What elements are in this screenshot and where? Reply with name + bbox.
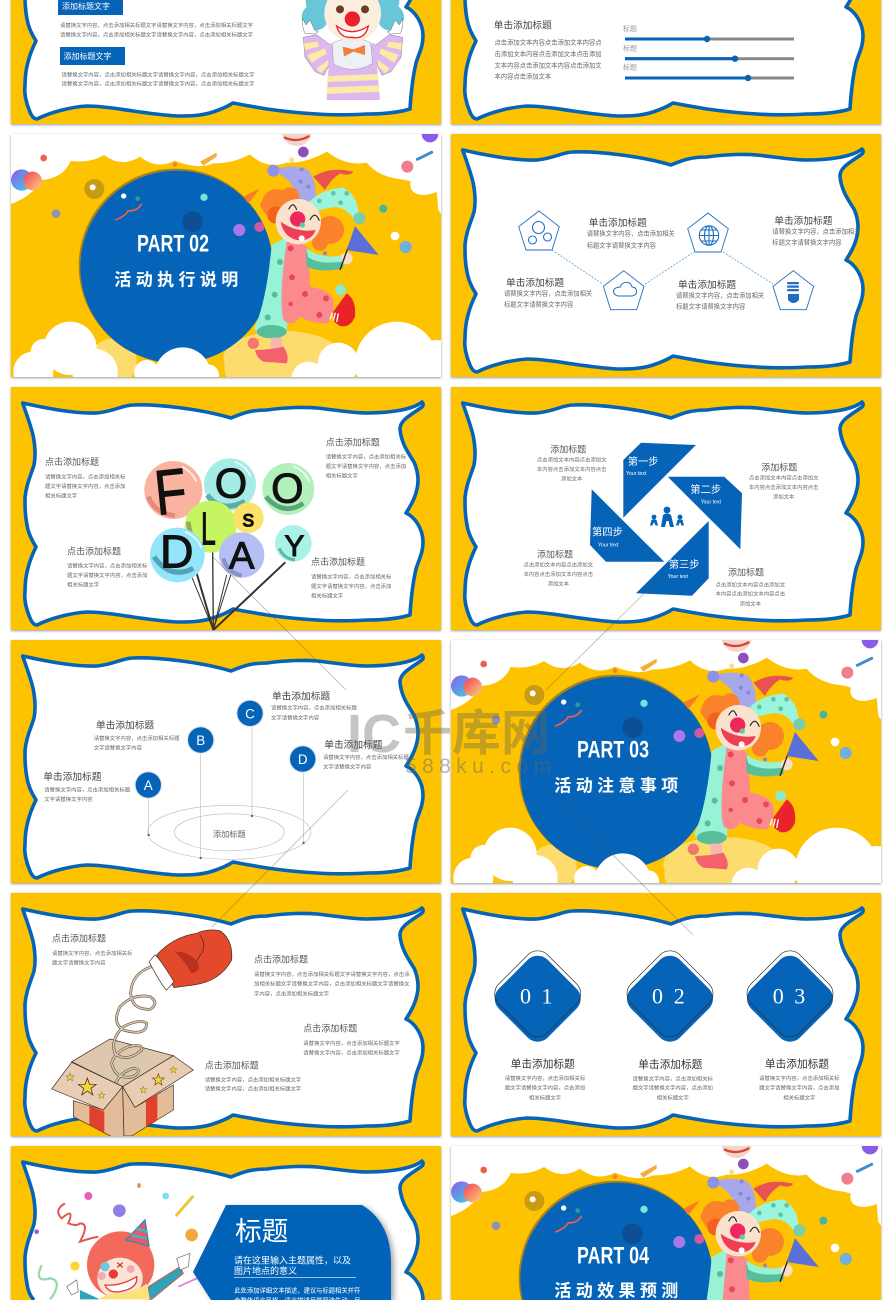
text block 1 — [587, 217, 676, 249]
text block 1 — [537, 443, 607, 483]
slider 2 — [623, 44, 794, 62]
slide: PART 04 divider (bottom right, cropped) — [451, 1127, 881, 1300]
text block 4 — [205, 1059, 301, 1093]
text block 1: 添加标题 — [550, 443, 586, 454]
part number: PART 03 — [577, 737, 649, 764]
text block D: 请替换文字内容，点击添加相关标题 — [323, 753, 409, 761]
text block 4: 添加文本 — [740, 599, 762, 607]
text block 2 — [326, 437, 407, 480]
diamond 03: 03 — [773, 983, 805, 1008]
step 1 blade: Your text — [626, 471, 647, 477]
badge D: D — [298, 752, 308, 767]
text block 1: 题文字请替换文字内容 — [52, 958, 106, 966]
illustration: balloons: O — [271, 464, 304, 511]
slide: clown with title panel (bottom left, cropped) — [11, 1146, 441, 1300]
text block 1: 请替换文字内容，点击添加相关 — [587, 229, 676, 238]
text block: 点击添加文本内容点击添加文本内容点 — [494, 37, 602, 46]
illustration: balloons: D — [160, 526, 194, 578]
text block 2: 请替换文字内容，点击添加相关标题文字请替换文字内容，点击添 — [254, 970, 410, 978]
text block B: 请替换文字内容，点击添加相关标题 — [94, 734, 180, 742]
text block 2: 添加标题 — [761, 461, 797, 472]
slider 1: 标题 — [623, 24, 637, 33]
badge A: A — [144, 778, 153, 793]
text block 4: 请替换文字内容，点击添加相关 — [676, 290, 765, 299]
text block 3: 添加标题 — [537, 548, 573, 559]
part number: PART 04 — [577, 1243, 649, 1270]
text block D: 文字请替换文字内容 — [323, 762, 372, 770]
icon: molecule pentagon — [519, 211, 559, 250]
step 4 blade: 第四步 — [592, 526, 623, 539]
text block C: 文字请替换文字内容 — [271, 713, 320, 721]
icon: three people — [650, 507, 684, 527]
badge C: C — [245, 706, 255, 721]
text block 2 — [254, 954, 410, 997]
text block: 本内容点击添加文本 — [494, 71, 552, 80]
slide: ABCD orbit diagram — [11, 640, 441, 883]
text block 3: 点击添加标题 — [303, 1022, 357, 1033]
text block 3 — [523, 548, 594, 588]
text block 3 — [303, 1022, 400, 1056]
text block C: 单击添加标题 — [272, 690, 330, 702]
heading tag 1 — [58, 0, 123, 15]
text block 3 — [67, 545, 148, 588]
text block 1: 请替换文字内容，点击添加相关标题文字请替换文字内容，点击添加相关标题文字 — [60, 30, 253, 38]
text block 3: 点击添加标题 — [67, 545, 121, 556]
text block 4: 题文字请替换文字内容，点击添加 — [311, 582, 391, 590]
text block 3: 单击添加标题 — [506, 277, 564, 289]
heading tag 2: 添加标题文字 — [64, 51, 112, 61]
text block 2: 标题文字请替换文字内容 — [772, 237, 842, 246]
step 1 blade: 第一步 — [628, 455, 659, 468]
watermark logo text — [347, 704, 551, 778]
text block 03: 题文字请替换文字内容，点击添加 — [759, 1083, 840, 1091]
step 4 blade — [590, 489, 664, 562]
illustration: balloons: L — [201, 502, 216, 554]
diamond 02 — [621, 945, 719, 1047]
badge B: B — [196, 733, 205, 748]
illustration: clown with confetti — [34, 1183, 210, 1299]
text block 2: 加相关标题文字请替换文字内容，点击添加相关标题文字请替换文 — [254, 979, 410, 987]
watermark — [212, 557, 693, 935]
text block 2: 点击添加文本内容点击添加文 — [749, 474, 819, 482]
heading: 单击添加标题 — [494, 20, 552, 32]
text block 4: 点击添加标题 — [205, 1059, 259, 1070]
title panel — [193, 1205, 391, 1300]
drop lines — [149, 727, 304, 858]
text block 4: 点击添加文本内容点击添加文 — [715, 580, 786, 588]
panel body: 此处添加详细文本描述，建议与标题相关并符 — [234, 1285, 360, 1294]
text block — [494, 37, 602, 80]
step 3 blade: 第三步 — [669, 558, 700, 571]
text block 02: 题文字请替换文字内容，点击添加 — [632, 1084, 713, 1092]
text block 2: 请替换文字内容，点击添加相关标题文字请替换文字内容，点击添加相关标题文字 — [62, 80, 254, 88]
heading tag 1: 添加标题文字 — [62, 1, 110, 11]
text block 4: 点击添加标题 — [311, 556, 365, 567]
panel subtitle: 图片地点的意义 — [234, 1265, 297, 1276]
illustration: balloons: A — [229, 534, 255, 577]
text block 2: 单击添加标题 — [774, 215, 833, 227]
text block 1: 点击添加文本内容点击添加文 — [537, 456, 607, 464]
slider 3 — [623, 62, 794, 81]
slider 3: 标题 — [623, 62, 637, 72]
text block 2: 请替换文字内容，点击添加相关 — [772, 226, 861, 235]
slide: boxing glove spring box — [11, 893, 441, 1137]
text block 2: 请替换文字内容，点击添加相关标题文字请替换文字内容，点击添加相关标题文字 — [62, 70, 254, 78]
text block 1: 添加文本 — [561, 475, 583, 483]
illustration: boxing glove in a box — [52, 930, 232, 1137]
text block 1: 点击添加标题 — [52, 933, 106, 944]
text block 1: 请替换文字内容，点击添加相关标 — [45, 472, 126, 480]
text block 2: 点击添加标题 — [326, 437, 380, 448]
badge D — [289, 745, 317, 773]
text block 3: 题文字请替换文字内容，点击添加 — [67, 571, 147, 579]
icon: globe pentagon — [688, 213, 728, 252]
circle badge cropped by the page edge — [519, 1181, 713, 1300]
text block 03 — [759, 1058, 840, 1101]
watermark logo text: 千库网 — [403, 707, 550, 761]
diamond 01: 01 — [520, 983, 552, 1008]
text block 2: 字内容，点击添加相关标题文字 — [254, 989, 329, 997]
text block 2: 请替换文字内容，点击添加相关标 — [326, 453, 407, 461]
text block 3: 标题文字请替换文字内容 — [504, 300, 574, 309]
slider 1 — [623, 24, 794, 42]
text block 4 — [715, 566, 786, 607]
slide: pentagon icons — [451, 134, 881, 377]
text block 02: 单击添加标题 — [638, 1058, 703, 1071]
anchor dots — [148, 815, 305, 859]
section title: 活动效果预测 — [554, 1282, 678, 1300]
text block 4: 请替换文字内容，点击添加相关标题文字 — [205, 1075, 301, 1083]
text block 3 — [504, 277, 593, 309]
text block 01: 题文字请替换文字内容，点击添加 — [505, 1083, 585, 1091]
slide: PART 02 divider — [11, 115, 460, 405]
text block D — [323, 739, 409, 770]
text block 1: 相关标题文字 — [45, 492, 77, 500]
text block 3: 请替换文字内容，点击添加相关标题文字 — [303, 1048, 400, 1056]
slide: PART 03 divider — [451, 621, 892, 911]
step 4 blade: Your text — [598, 542, 619, 548]
text block 4 — [311, 556, 392, 599]
text block: 文本内容点击添加文本内容点击添加文 — [494, 60, 602, 69]
panel subtitle: 请在这里输入主题属性，以及 — [234, 1254, 351, 1265]
part number: PART 02 — [137, 231, 209, 258]
text block 1 — [45, 456, 126, 500]
text block 03: 请替换文字内容，点击添加相关标 — [759, 1074, 840, 1082]
section title: 活动执行说明 — [114, 270, 238, 290]
text block 4: 请替换文字内容，点击添加相关标 — [311, 572, 392, 580]
text block A: 文字请替换文字内容 — [44, 795, 93, 803]
text block 02 — [632, 1058, 714, 1101]
text block 01 — [505, 1058, 586, 1101]
text block 01: 单击添加标题 — [511, 1058, 575, 1070]
text block A — [43, 771, 131, 803]
text block 3: 相关标题文字 — [67, 580, 99, 588]
step 3 blade: Your text — [668, 574, 689, 580]
badge B — [187, 726, 215, 754]
illustration: balloons: O — [215, 460, 247, 507]
watermark diagonal lines — [212, 557, 693, 935]
text block 2: 题文字请替换文字内容，点击添加 — [326, 462, 406, 470]
text block A: 单击添加标题 — [43, 771, 102, 783]
text block B: 单击添加标题 — [96, 720, 154, 732]
center label: 添加标题 — [213, 829, 246, 839]
heading tag 2 — [60, 47, 125, 65]
slide: progress bars (top right, cropped) — [451, 0, 881, 124]
watermark logo text: 588ku.com — [405, 755, 551, 778]
step 2 blade — [668, 477, 742, 549]
slide: 01 02 03 diamonds — [451, 893, 881, 1136]
text block B: 文字请替换文字内容 — [94, 744, 143, 752]
text block 1: 请替换文字内容，点击添加相关标 — [52, 949, 133, 957]
panel title: 标题 — [235, 1216, 288, 1246]
text block 4: 标题文字请替换文字内容 — [676, 301, 746, 310]
text block 1: 标题文字请替换文字内容 — [587, 240, 657, 249]
step 1 blade — [623, 443, 696, 518]
text block 4: 请替换文字内容，点击添加相关标题文字 — [205, 1085, 301, 1093]
text block 1 — [60, 21, 253, 38]
text block 1: 本内容点击添加文本内容点击 — [537, 465, 607, 473]
illustration: balloons: s — [242, 506, 254, 532]
text block 1 — [52, 933, 133, 966]
text block 3: 本内容点击添加文本内容点击 — [523, 570, 594, 578]
slider 2: 标题 — [623, 44, 637, 52]
text block 01: 请替换文字内容，点击添加相关标 — [505, 1074, 586, 1082]
step 2 blade: Your text — [701, 499, 722, 505]
panel subtitle — [234, 1254, 351, 1276]
watermark logo text: IC — [347, 704, 401, 764]
orbit ellipses — [148, 805, 311, 859]
text block 02: 相关标题文字 — [657, 1093, 689, 1101]
diamond 01 — [489, 945, 586, 1047]
text block B — [94, 720, 180, 752]
dashed connectors — [552, 250, 773, 284]
text block 2: 点击添加标题 — [254, 954, 308, 965]
text block 4: 单击添加标题 — [678, 279, 736, 291]
illustration: balloons — [144, 456, 314, 630]
text block C: 请替换文字内容，点击添加相关标题 — [271, 704, 357, 712]
step 3 blade — [636, 521, 709, 596]
section title: 活动注意事项 — [554, 776, 678, 796]
illustration: clown with blue hair — [302, 0, 404, 100]
badge C — [236, 699, 264, 727]
text block 03: 单击添加标题 — [765, 1058, 829, 1070]
text block A: 请替换文字内容，点击添加相关标题 — [44, 785, 131, 793]
icon: cloud pentagon — [603, 271, 644, 310]
text block 4: 本内容点击添加文本内容点击 — [715, 590, 786, 598]
text block 4: 相关标题文字 — [311, 591, 343, 599]
text block 1: 单击添加标题 — [589, 217, 647, 229]
text block 3: 请替换文字内容，点击添加相关标 — [67, 561, 148, 569]
slide: FOOLS DAY balloons — [11, 387, 441, 630]
step 2 blade: 第二步 — [690, 483, 721, 496]
text block 2: 相关标题文字 — [326, 472, 358, 480]
text block 1: 点击添加标题 — [45, 456, 99, 467]
text block 3: 添加文本 — [548, 580, 570, 588]
text block C — [271, 690, 357, 721]
text block D: 单击添加标题 — [324, 739, 383, 751]
illustration: balloons: F — [151, 456, 190, 529]
illustration: balloons: Y — [284, 530, 304, 563]
text block 3: 请替换文字内容，点击添加相关标题文字 — [303, 1039, 400, 1047]
diamond 02: 02 — [652, 983, 685, 1008]
text block 2 — [749, 461, 819, 501]
badge A — [134, 771, 162, 799]
slide: four steps pinwheel — [451, 387, 881, 630]
diamond 03 — [741, 945, 839, 1047]
text block 3: 请替换文字内容，点击添加相关 — [504, 288, 593, 297]
text block 2: 添加文本 — [773, 493, 795, 501]
text block 1: 请替换文字内容，点击添加相关标题文字请替换文字内容，点击添加相关标题文字 — [60, 21, 253, 29]
text block 1: 题文字请替换文字内容，点击添加 — [45, 482, 125, 490]
slide: clown text slide (top left, cropped) — [11, 0, 441, 124]
text block 2: 本内容点击添加文本内容点击 — [749, 483, 819, 491]
text block 03: 相关标题文字 — [783, 1093, 815, 1101]
text block 2 — [62, 70, 254, 88]
icon: light bulb pentagon — [773, 271, 814, 310]
clown body cropped by the page edge — [707, 1249, 750, 1300]
panel body — [234, 1285, 361, 1300]
text block 4 — [676, 279, 765, 310]
text block 3: 点击添加文本内容点击添加文 — [523, 560, 594, 568]
text block 2 — [772, 215, 861, 246]
text block 01: 相关标题文字 — [529, 1093, 561, 1101]
text block 4: 添加标题 — [728, 566, 764, 577]
text block: 击添加文本内容点击添加文本点击添加 — [494, 49, 602, 58]
text block 02: 请替换文字内容，点击添加相关标 — [632, 1074, 714, 1082]
